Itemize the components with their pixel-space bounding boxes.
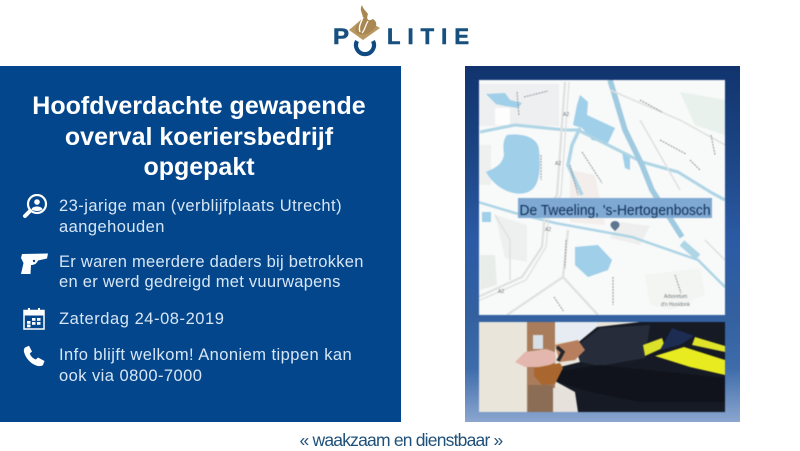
tagline: « waakzaam en dienstbaar » <box>300 430 502 450</box>
map: lakes <box>482 93 630 277</box>
text: tips <box>59 346 352 384</box>
text: perpetrators: Er waren meerdere daders bij betrokken <box>59 253 364 271</box>
text: date: Zaterdag 24-08-2019 <box>59 310 224 328</box>
map: location pin <box>610 221 620 231</box>
heading: Hoofdverdachte gewapende <box>32 92 366 120</box>
map: canals <box>478 80 725 287</box>
text: suspect: 23-jarige man (verblijfplaats Utrecht) <box>59 197 342 215</box>
hands and cuff <box>555 340 585 362</box>
logo flame and diamond <box>349 5 380 40</box>
map: road numbers and arboretum label: A2 <box>498 289 504 295</box>
map: street labels <box>517 91 715 312</box>
icon: handgun <box>21 254 48 274</box>
panel: right image frame <box>465 66 740 422</box>
text: tips: Info blijft welkom! Anoniem tippen kan <box>59 346 352 364</box>
map: road numbers and arboretum label <box>498 112 691 308</box>
icon: telephone <box>24 346 44 366</box>
map: location label: De Tweeling, 's-Hertogenbosch <box>520 203 710 219</box>
heading: overval koeriersbedrijf <box>65 122 333 150</box>
logo wordmark: LITIE <box>387 24 469 49</box>
map: road numbers and arboretum label: Arboretum <box>664 294 687 300</box>
photo: police officer handcuffing <box>478 321 726 413</box>
logo: Politie <box>333 5 469 56</box>
map: road numbers and arboretum label: d'n Hooidonk <box>661 302 691 308</box>
logo letter O ring <box>356 41 374 54</box>
logo wordmark: P <box>333 24 349 49</box>
map <box>478 79 726 316</box>
map: roads <box>478 82 725 315</box>
text: perpetrators <box>59 253 364 291</box>
heading <box>32 92 366 181</box>
map: road numbers and arboretum label: A2 <box>555 161 561 167</box>
officer body <box>553 322 725 412</box>
logo wordmark <box>333 24 469 49</box>
text: perpetrators: en er werd gedreigd met vuurwapens <box>59 273 341 291</box>
map: road numbers and arboretum label: A2 <box>563 112 569 118</box>
reflective stripes <box>643 338 665 356</box>
text: tips: ook via 0800-7000 <box>59 366 202 384</box>
heading: opgepakt <box>143 153 255 181</box>
panel: left blue information panel <box>0 66 401 422</box>
text: suspect <box>59 197 342 236</box>
icon: calendar <box>23 308 45 330</box>
text: suspect: aangehouden <box>59 218 165 236</box>
map: built-up areas <box>479 84 725 310</box>
map: road numbers and arboretum label: A2 <box>545 227 551 233</box>
icon: magnifier with person <box>22 194 48 218</box>
